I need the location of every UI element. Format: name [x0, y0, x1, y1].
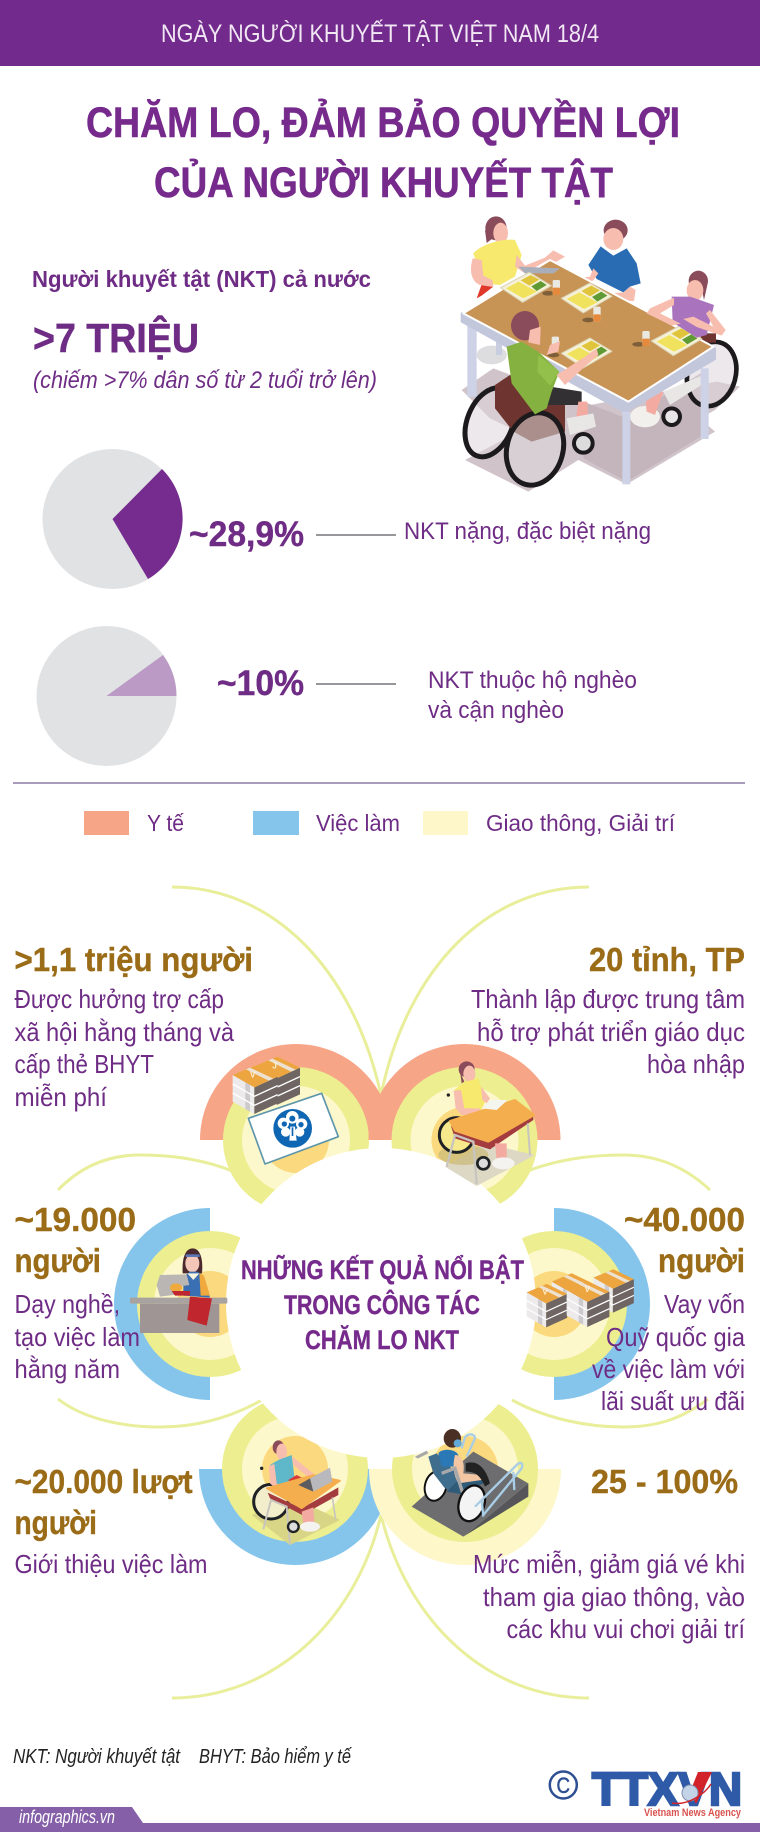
text block: ~40.000 người: Quỹ quốc gia [606, 1322, 745, 1352]
text block: ~19.000 người: hằng năm [14, 1354, 120, 1384]
person: man in blue [568, 220, 641, 301]
legend: Giao thông, Giải trí [486, 810, 676, 836]
text block: 25 - 100%: 25 - 100% [591, 1463, 738, 1500]
footer bar [0, 1807, 760, 1832]
wheelchair right [630, 333, 743, 427]
text block: ~19.000 người: tạo việc làm [14, 1322, 140, 1352]
connecting curved lines [58, 887, 710, 1698]
hub rings: Việc làm bottom left [199, 1396, 391, 1565]
person: woman in yellow [471, 216, 565, 298]
text block: >1,1 triệu người: >1,1 triệu người [14, 941, 253, 978]
icon: woman in wheelchair with laptop [252, 1440, 340, 1545]
text block: national total: Người khuyết tật (NKT) cả nước [32, 266, 371, 292]
pie chart: 10% [36, 626, 176, 766]
center heading: CHĂM LO NKT [305, 1324, 459, 1355]
illustration: people dining at table [455, 216, 743, 492]
text block: >1,1 triệu người: cấp thẻ BHYT [14, 1049, 154, 1079]
legend: Y tế [147, 810, 184, 836]
hub rings: Việc làm middle left [114, 1208, 283, 1400]
hub rings: Y tế top left [200, 1044, 392, 1213]
icon: money and health insurance card: V [250, 1071, 256, 1080]
logo: TTXVN: TTXVN [592, 1763, 742, 1815]
icon: money and health insurance card [233, 1057, 338, 1164]
title [86, 98, 680, 207]
stat: NKT thuộc hộ nghèo và cận nghèo: ~10% [217, 664, 304, 703]
text block: 20 tỉnh, TP: hỗ trợ phát triển giáo dục [477, 1017, 745, 1047]
icon: stacks of money: V [585, 1285, 591, 1294]
text block: ~40.000 người: ~40.000 [624, 1201, 745, 1238]
text block: >1,1 triệu người: xã hội hằng tháng và [14, 1017, 234, 1047]
footnote: NKT: Người khuyết tật [13, 1746, 181, 1768]
icon: wheelchair on ramp [412, 1429, 528, 1537]
pie chart: 28,9% [42, 449, 183, 589]
text block: >1,1 triệu người: miễn phí [14, 1082, 108, 1112]
text block: ~40.000 người: Vay vốn [664, 1289, 745, 1319]
footnote [13, 1746, 353, 1768]
person: man in green wheelchair [455, 311, 598, 492]
text block: >1,1 triệu người: Được hưởng trợ cấp [14, 984, 224, 1014]
text block: 25 - 100% [473, 1463, 746, 1644]
icon: money and health insurance card: J [272, 1062, 277, 1071]
center heading [241, 1253, 524, 1355]
icon: stacks of money [527, 1269, 634, 1327]
text block: >1,1 triệu người [14, 941, 253, 1112]
legend: Việc làm [316, 810, 400, 836]
text block: national total: (chiếm >7% dân số từ 2 tuổi trở lên) [33, 367, 377, 394]
text block: ~20.000 lượt người: Giới thiệu việc làm [14, 1549, 208, 1579]
stat: NKT thuộc hộ nghèo và cận nghèo: NKT thuộc hộ nghèo [428, 667, 637, 694]
hub rings: Việc làm middle right [481, 1208, 650, 1400]
icon: stacks of money: V [543, 1287, 548, 1296]
hub rings: Y tế top right [368, 1044, 560, 1213]
text block: ~19.000 người: người [14, 1242, 101, 1279]
trays and glasses [501, 272, 702, 368]
stat: NKT thuộc hộ nghèo và cận nghèo [217, 664, 637, 724]
text block: ~19.000 người [14, 1201, 140, 1384]
text block: ~40.000 người [592, 1201, 745, 1416]
hub rings: Giao thông bottom right [369, 1396, 561, 1565]
stat: NKT nặng, đặc biệt nặng [189, 515, 651, 554]
footer bar: infographics.vn [19, 1807, 115, 1827]
stat: NKT thuộc hộ nghèo và cận nghèo: và cận nghèo [428, 697, 564, 724]
header banner [0, 0, 760, 66]
text block: national total: >7 TRIỆU [33, 315, 199, 361]
text block: ~20.000 lượt người: ~20.000 lượt [14, 1463, 193, 1500]
text block: national total [32, 266, 377, 394]
stat: NKT nặng, đặc biệt nặng: ~28,9% [189, 515, 304, 554]
table top [462, 260, 715, 484]
text block: ~19.000 người: Dạy nghề, [14, 1289, 120, 1319]
text block: ~20.000 lượt người [14, 1463, 208, 1579]
text block: ~20.000 lượt người: người [14, 1504, 97, 1541]
logo: TTXVN: C [556, 1773, 570, 1798]
center heading: TRONG CÔNG TÁC [284, 1289, 480, 1320]
title: CHĂM LO, ĐẢM BẢO QUYỀN LỢI [86, 98, 680, 147]
text block: 20 tỉnh, TP: hòa nhập [647, 1049, 745, 1079]
person: woman in purple [647, 271, 726, 338]
stat: NKT nặng, đặc biệt nặng: NKT nặng, đặc biệt nặng [404, 518, 651, 545]
icon: woman in wheelchair at desk reading [438, 1061, 535, 1186]
icon: woman at sewing machine [130, 1248, 227, 1333]
text block: 25 - 100%: tham gia giao thông, vào [483, 1582, 745, 1612]
title: CỦA NGƯỜI KHUYẾT TẬT [154, 158, 613, 207]
footnote: BHYT: Bảo hiểm y tế [199, 1746, 353, 1768]
text block: ~40.000 người: lãi suất ưu đãi [601, 1386, 745, 1416]
center heading: NHỮNG KẾT QUẢ NỔI BẬT [241, 1253, 524, 1285]
text block: ~40.000 người: về việc làm với [592, 1354, 745, 1384]
text block: ~40.000 người: người [658, 1242, 745, 1279]
text block: 20 tỉnh, TP [471, 941, 745, 1079]
logo: TTXVN: Vietnam News Agency [644, 1807, 742, 1819]
text block: 20 tỉnh, TP: 20 tỉnh, TP [589, 941, 745, 978]
legend [84, 810, 676, 836]
text block: ~19.000 người: ~19.000 [14, 1201, 136, 1238]
central white circle [226, 1148, 536, 1458]
header banner: NGÀY NGƯỜI KHUYẾT TẬT VIỆT NAM 18/4 [161, 19, 599, 48]
